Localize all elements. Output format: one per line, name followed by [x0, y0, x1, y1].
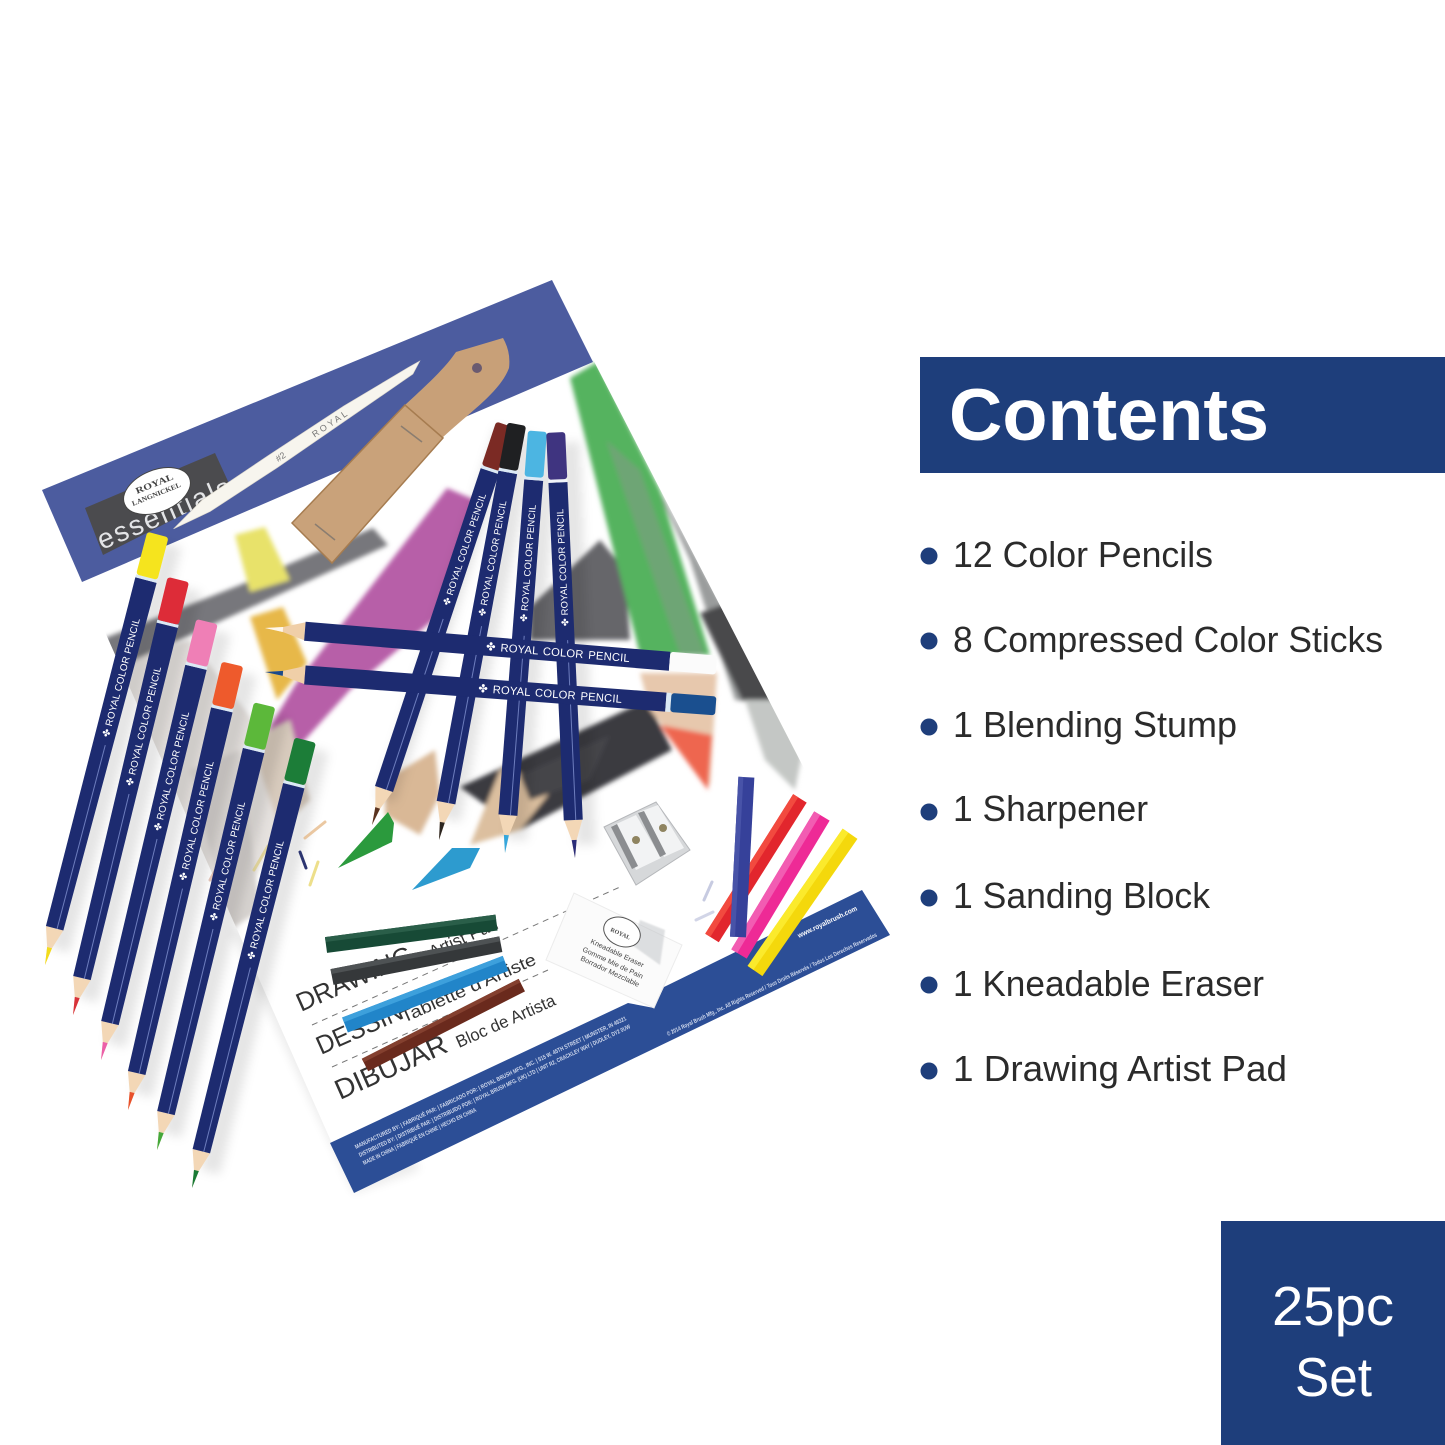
legal text on band: DISTRIBUTED BY: | DISTRIBUÉ PAR: | DISTRIBUIDO POR: | ROYAL BRUSH MFG. (UK) LTD | UNIT R2, CRACKLEY WAY | DUDLEY, DY2 0UW [357, 1022, 632, 1159]
stick: dark green [325, 915, 498, 953]
pencils: upper group [264, 422, 717, 858]
pencil: red [62, 577, 189, 1018]
item: sanding block: 1 Sanding Block [953, 875, 1211, 916]
cover photo [105, 362, 802, 930]
blending stump [169, 356, 425, 535]
essentials logo plate: essentials [92, 471, 237, 556]
pencil: dark green: ✤ ROYAL COLOR PENCIL [246, 839, 287, 961]
stick: brown [362, 979, 525, 1071]
blending stump: ROYAL [310, 409, 349, 439]
kneadable eraser: Kneadable Eraser [589, 938, 645, 970]
legal text on band [353, 906, 879, 1167]
top blue band [42, 280, 593, 582]
bottom blue band [330, 890, 890, 1193]
item: drawing pad: 1 Drawing Artist Pad [953, 1048, 1287, 1089]
stick: red [705, 794, 807, 942]
pencil: black: ✤ ROYAL COLOR PENCIL [476, 499, 508, 617]
pad title text: DIBUJAR [330, 1028, 452, 1105]
pencil: light green [146, 702, 275, 1153]
pencil: dark green [181, 737, 316, 1191]
compressed sticks: bright group [705, 777, 857, 976]
pencil: yellow [34, 532, 169, 968]
pencil: orange [117, 662, 243, 1113]
item: kneadable eraser: 1 Kneadable Eraser [953, 963, 1264, 1004]
pad title text: DESSIN [311, 996, 407, 1060]
sharpener [604, 802, 690, 885]
pad title text: DRAWING [291, 939, 417, 1017]
pencil shadows [60, 430, 586, 1172]
legal text on band: © 2014 Royal Brush Mfg., Inc. All Rights Reserved / Tous Droits Réservés / Todos Los Derechos Reservados [666, 931, 879, 1038]
sanding block [292, 338, 509, 563]
stick: navy [730, 777, 754, 937]
pencil: pink [90, 619, 218, 1063]
pad title text: Bloc de Artista [453, 991, 559, 1052]
set size badge [1221, 1221, 1445, 1445]
pencil: navy horizontal [264, 663, 716, 715]
kneadable eraser: ROYAL [609, 927, 631, 941]
item: color pencils: 12 Color Pencils [953, 534, 1213, 575]
essentials logo plate: ROYAL [134, 472, 175, 496]
pad title text: Artist Pad [426, 914, 501, 962]
pencil: yellow: ✤ ROYAL COLOR PENCIL [101, 617, 143, 739]
legal text on band: www.royalbrush.com [796, 906, 859, 940]
pencil: purple [546, 432, 584, 858]
kneadable eraser: Gomme Mie de Pain [581, 946, 644, 981]
contents list [920, 534, 1383, 1089]
pad title text [291, 914, 559, 1105]
pencil: white horizontal: ✤ ROYAL COLOR PENCIL [486, 641, 630, 665]
stick: pink [731, 811, 830, 959]
contents header bar: Contents [949, 375, 1269, 456]
set size badge: Set [1295, 1346, 1372, 1408]
drawing pad [42, 280, 890, 1193]
compressed sticks: dark group [325, 915, 525, 1071]
item: blending stump: 1 Blending Stump [953, 704, 1237, 745]
item: sharpener: 1 Sharpener [953, 788, 1148, 829]
item: color sticks: 8 Compressed Color Sticks [953, 619, 1383, 660]
pencil: brown: ✤ ROYAL COLOR PENCIL [440, 492, 488, 607]
legal text on band: MADE IN CHINA | FABRIQUÉ EN CHINE | HECHO EN CHINA [361, 1106, 478, 1167]
kneadable eraser [546, 893, 682, 1008]
pencil: navy horizontal: ✤ ROYAL COLOR PENCIL [478, 683, 622, 706]
pad title text: Tablette d'Artiste [398, 950, 539, 1027]
pencil: white horizontal [264, 619, 717, 675]
pencil: light green: ✤ ROYAL COLOR PENCIL [209, 800, 248, 922]
set size badge: 25pc [1272, 1275, 1394, 1337]
stick: yellow [748, 829, 857, 976]
kneadable eraser: Borrador Mezclable [579, 955, 640, 989]
pencil: pink: ✤ ROYAL COLOR PENCIL [153, 710, 192, 832]
legal text on band: MANUFACTURED BY: | FABRIQUÉ PAR: | FABRICADO POR: | ROYAL BRUSH MFG., INC. | 515 W. 45TH STREET | MUNSTER, IN 46321 [353, 1014, 628, 1151]
pencil: purple: ✤ ROYAL COLOR PENCIL [554, 508, 570, 626]
pencil: brown [363, 422, 514, 828]
pencil: black [430, 422, 526, 842]
pencil: sky blue [496, 431, 547, 854]
pencils: left group [34, 532, 316, 1191]
pencil: sky blue: ✤ ROYAL COLOR PENCIL [518, 504, 538, 622]
wood shavings [210, 822, 713, 945]
blending stump: #2 [274, 450, 288, 464]
pencil: red: ✤ ROYAL COLOR PENCIL [125, 665, 164, 787]
stick: charcoal [330, 936, 502, 985]
essentials logo plate: LANGNICKEL [131, 481, 182, 508]
stick: sky blue [342, 956, 508, 1032]
pencil: orange: ✤ ROYAL COLOR PENCIL [178, 759, 217, 882]
contents header bar [920, 357, 1445, 473]
big pencil tips in cover photo [338, 812, 480, 890]
dashed divider lines [312, 887, 620, 1067]
